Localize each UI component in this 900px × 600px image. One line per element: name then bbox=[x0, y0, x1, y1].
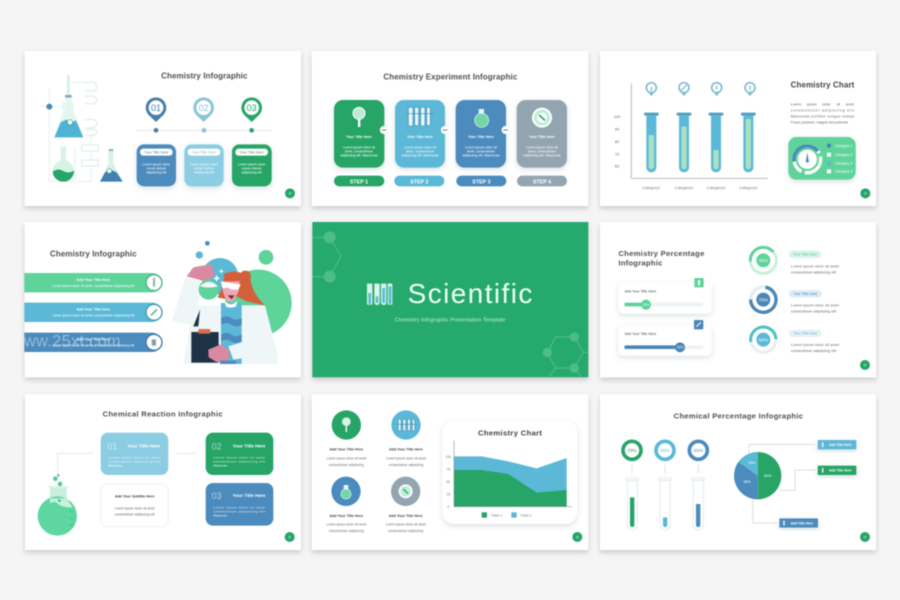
label: green: Add Title Here bbox=[829, 469, 852, 473]
test tube bar chart: 90 bbox=[615, 126, 620, 131]
title: Scientific bbox=[408, 278, 532, 309]
card 1: conse ctetuer bbox=[146, 167, 167, 171]
ring 1: 40% bbox=[749, 246, 777, 274]
label 3: Lorem ipsum dolor sit amet bbox=[791, 343, 839, 347]
pie chart bbox=[734, 452, 781, 499]
pin: 01: 01 bbox=[151, 103, 161, 113]
step card 3: Your Title Here bbox=[468, 135, 494, 139]
area chart card: 0 bbox=[447, 505, 449, 509]
subtitle box: Lorem ipsum dolor sit amet bbox=[115, 506, 155, 510]
area chart card: 100 bbox=[446, 455, 451, 459]
step card 3: Lorem ipsum dolor sit bbox=[465, 146, 497, 150]
step pill 3: STEP 3 bbox=[472, 179, 490, 185]
icon item 4: Lorem ipsum dolor sit amet bbox=[386, 523, 426, 527]
icon item 4 bbox=[386, 477, 426, 533]
icon: test tubes bbox=[367, 284, 392, 305]
pin: 01 bbox=[146, 97, 166, 122]
banner 1: Lorem ipsum dolor sit amet, consectetuer adipiscing elit bbox=[52, 284, 134, 288]
box 01: consectetuer adipiscing elit bbox=[108, 460, 160, 464]
icon item 2: Lorem ipsum dolor sit amet bbox=[386, 456, 426, 460]
step card 3: adipiscing elit. Maecenas bbox=[462, 154, 500, 158]
legend card with gauge: Category 1 bbox=[835, 144, 853, 148]
test tube bar chart: 80 bbox=[615, 139, 620, 144]
label 3: Your Title Here bbox=[793, 332, 817, 336]
page number badge bbox=[572, 532, 582, 542]
test tube bar chart: Category3 bbox=[707, 185, 726, 190]
body text: Fusce posuere, magna sed pulvinar bbox=[791, 121, 849, 125]
card 3: Your Title Here bbox=[240, 151, 264, 155]
icon item 4: Add Your Title Here bbox=[389, 514, 423, 518]
panel: chemistry infographic scientist bbox=[23, 222, 301, 377]
card 2: Lorem ipsum dolor bbox=[190, 163, 219, 167]
label 2: consectetuer adipiscing elit bbox=[791, 310, 836, 314]
icon item 2: Add Your Title Here bbox=[389, 448, 423, 452]
label 1: consectetuer adipiscing elit bbox=[791, 271, 836, 275]
icon item 3: Lorem ipsum dolor sit amet bbox=[326, 523, 366, 527]
icon item 4: consectetuer adipiscing bbox=[388, 529, 423, 533]
icon item 1: Lorem ipsum dolor sit amet bbox=[326, 456, 366, 460]
label 1: Your Title Here bbox=[793, 253, 817, 257]
banner 1 bbox=[24, 273, 162, 292]
box 01 bbox=[101, 433, 168, 475]
step card 4: amet, consectetuer bbox=[528, 150, 557, 154]
step card 4: Your Title Here bbox=[529, 135, 555, 139]
step card 1: adipiscing elit. Maecenas bbox=[340, 154, 378, 158]
panel: chemical percentage bbox=[600, 394, 876, 550]
box 02: Lorem ipsum dolor sit amet bbox=[213, 456, 265, 460]
card 2 bbox=[184, 144, 224, 186]
percent ring and tube 2: 20% bbox=[660, 448, 670, 453]
step card 4: adipiscing elit. Maecenas bbox=[523, 154, 561, 158]
step pill 4 bbox=[517, 176, 567, 186]
step pill 2 bbox=[394, 176, 444, 186]
subtitle: Chemistry Infographic Presentation Template bbox=[395, 318, 505, 324]
slider card 1: Add Your Title Here bbox=[625, 289, 656, 293]
box 01: Maecenas bbox=[108, 464, 123, 468]
box 03: Maecenas bbox=[213, 514, 228, 518]
area chart card: 75 bbox=[446, 468, 450, 472]
heading: Chemical Reaction Infographic bbox=[103, 410, 223, 419]
area chart card: Chemistry Chart bbox=[478, 429, 542, 438]
card 2: Your Title Here bbox=[192, 151, 216, 155]
body text: consectetuer adipiscing elit bbox=[791, 109, 854, 113]
box 03 bbox=[206, 483, 273, 526]
percent ring and tube 1: 70% bbox=[627, 448, 637, 453]
step card 4 bbox=[517, 100, 567, 168]
arrow connectors bbox=[380, 126, 510, 134]
test tube bar chart: Category2 bbox=[675, 185, 694, 190]
box 03: Lorem ipsum dolor sit amet bbox=[213, 506, 265, 510]
banner 1: Add Your Title Here bbox=[76, 278, 110, 282]
banner 3: Lorem ipsum dolor sit amet, consectetuer adipiscing elit bbox=[52, 344, 134, 348]
box 03: Your Title Here bbox=[233, 493, 266, 498]
label 3 bbox=[789, 330, 839, 353]
page number badge bbox=[860, 188, 870, 198]
icon item 2: consectetuer adipiscing bbox=[389, 463, 424, 467]
step card 1: amet, consectetuer bbox=[345, 150, 374, 154]
label 2 bbox=[789, 290, 839, 314]
ring 2: 70%: 70% bbox=[759, 297, 768, 302]
subtitle box bbox=[101, 484, 168, 527]
icon item 2 bbox=[386, 410, 426, 467]
illustration: scientist bbox=[172, 241, 292, 364]
heading bbox=[618, 249, 704, 268]
ring 3: 50% bbox=[749, 325, 778, 354]
box 02: consectetuer adipiscing elit bbox=[213, 460, 265, 464]
slider card 2: 70% bbox=[677, 346, 683, 350]
step card 4: Lorem ipsum dolor sit bbox=[526, 146, 558, 150]
step pill 1 bbox=[334, 176, 384, 186]
test tube bar chart: 100 bbox=[614, 114, 621, 119]
banner 3 bbox=[24, 333, 162, 352]
step card 2: adipiscing elit. Maecenas bbox=[401, 154, 439, 158]
percent ring and tube 2 bbox=[656, 441, 674, 530]
connector arrows bbox=[749, 444, 815, 523]
box 03: consectetuer adipiscing elit bbox=[213, 510, 265, 514]
illustration: flask bbox=[38, 474, 77, 536]
decoration: molecule top left bbox=[312, 231, 341, 283]
step pill 2: STEP 2 bbox=[410, 179, 428, 185]
panel: chemical reaction bbox=[25, 394, 301, 550]
label: blue: Add Title Here bbox=[791, 521, 813, 525]
label 2: Lorem ipsum dolor sit amet bbox=[791, 303, 839, 307]
test tube bar chart: Category1 bbox=[642, 185, 661, 190]
step card 1: Lorem ipsum dolor sit bbox=[343, 146, 375, 150]
page number badge bbox=[860, 532, 870, 542]
step pill 3 bbox=[456, 176, 506, 186]
heading: Chemical Percentage Infographic bbox=[674, 411, 804, 420]
step card 3 bbox=[456, 100, 506, 168]
arrows bbox=[58, 453, 197, 475]
heading: Chemistry Infographic bbox=[161, 72, 248, 81]
area chart card: 50 bbox=[446, 480, 450, 484]
legend card with gauge: Category 3 bbox=[835, 162, 853, 166]
legend card with gauge: Category 4 bbox=[835, 170, 853, 174]
pin: 03: 03 bbox=[247, 103, 257, 113]
area chart card: 25 bbox=[446, 493, 450, 497]
test tube bar chart: 70 bbox=[615, 151, 620, 156]
icon item 3: Add Your Title Here bbox=[329, 514, 363, 518]
card 3 bbox=[232, 144, 272, 186]
pin: 03 bbox=[241, 97, 262, 122]
ring 3: 50%: 50% bbox=[759, 337, 768, 342]
test tube bar chart: 60 bbox=[615, 164, 620, 169]
heading: Chemistry Chart bbox=[791, 80, 855, 89]
card 2: adipiscing elit bbox=[194, 171, 214, 175]
label 3: consectetuer adipiscing elit bbox=[791, 349, 836, 353]
label: blue bbox=[779, 518, 818, 528]
ring 1: 40%: 40% bbox=[759, 258, 768, 263]
icon item 1: consectetuer adipiscing bbox=[329, 463, 364, 467]
test tube bar chart bbox=[614, 83, 768, 190]
box 01: Lorem ipsum dolor sit amet bbox=[108, 456, 160, 460]
icon item 3: consectetuer adipiscing bbox=[329, 529, 364, 533]
legend card with gauge bbox=[788, 137, 856, 180]
card 1 bbox=[137, 144, 176, 186]
illustration: lab apparatus bbox=[40, 75, 123, 182]
decoration: molecule bottom right bbox=[543, 332, 588, 377]
card 1: adipiscing elit bbox=[146, 171, 166, 175]
panel: chemistry infographic timeline bbox=[25, 51, 301, 206]
slider card 1: 20% bbox=[643, 303, 649, 307]
step pill 4: STEP 4 bbox=[533, 179, 551, 185]
test tube bar chart: Category4 bbox=[739, 185, 758, 190]
page number badge bbox=[860, 360, 870, 370]
box 02: 02 bbox=[212, 441, 222, 451]
slider card 2 bbox=[618, 320, 712, 356]
box 02 bbox=[206, 433, 273, 475]
card 1: Your Title Here bbox=[144, 151, 168, 155]
box 01: 01 bbox=[107, 441, 117, 451]
ring 2: 70% bbox=[749, 285, 778, 314]
heading: Infographic bbox=[618, 259, 663, 268]
timeline bbox=[137, 128, 272, 133]
subtitle box: Add Your Subtitle Here bbox=[115, 494, 155, 498]
icon item 1: Add Your Title Here bbox=[329, 448, 363, 452]
label 1: Lorem ipsum dolor sit amet bbox=[791, 264, 839, 268]
subtitle box: consectetuer adipiscing elit bbox=[115, 512, 155, 516]
card 2: conse ctetuer bbox=[194, 167, 215, 171]
page number badge bbox=[285, 532, 295, 542]
area chart card bbox=[442, 421, 577, 524]
panel: chemistry chart area bbox=[312, 394, 588, 550]
panel: chemistry percentage bbox=[600, 222, 876, 377]
box 02: Maecenas bbox=[213, 464, 228, 468]
pie chart: 35% bbox=[743, 480, 751, 484]
step pill 1: STEP 1 bbox=[350, 179, 368, 185]
label: sky: Add Title Here bbox=[829, 443, 852, 447]
percent ring and tube 1 bbox=[623, 441, 641, 530]
banner 2: Lorem ipsum dolor sit amet, consectetuer adipiscing elit bbox=[52, 314, 134, 318]
label: sky bbox=[818, 440, 856, 449]
area chart card: Class 1 bbox=[491, 513, 502, 517]
step card 2: Lorem ipsum dolor sit bbox=[404, 146, 436, 150]
heading: Chemistry Infographic bbox=[50, 250, 137, 259]
heading: Chemistry Experiment Infographic bbox=[383, 72, 518, 81]
body text: Maecenas porttitor congue massa bbox=[791, 115, 855, 119]
icon item 1 bbox=[326, 410, 366, 467]
watermark: ww.25xt.com bbox=[23, 333, 121, 351]
panel: scientific title slide bbox=[312, 222, 588, 377]
step card 2: amet, consectetuer bbox=[406, 150, 435, 154]
pie chart: 15% bbox=[748, 461, 756, 465]
box 01: Your Title Here bbox=[127, 443, 160, 448]
slider card 2: Add Your Title Here bbox=[625, 332, 656, 336]
box 02: Your Title Here bbox=[233, 443, 266, 448]
pie chart: 50% bbox=[764, 474, 772, 478]
banner 2: Add Your Title Here bbox=[76, 307, 110, 311]
pin: 02 bbox=[193, 97, 214, 122]
heading: Chemistry Percentage bbox=[618, 249, 704, 258]
card 3: Lorem ipsum dolor bbox=[238, 163, 266, 167]
step card 1: Your Title Here bbox=[346, 135, 372, 139]
body text bbox=[791, 102, 855, 125]
panel: chemistry experiment steps bbox=[312, 51, 588, 206]
body text: Lorem ipsum dolor sit amet bbox=[791, 102, 854, 106]
legend card with gauge: Category 2 bbox=[835, 153, 853, 157]
percent ring and tube 3: 50% bbox=[694, 448, 703, 453]
step card 2 bbox=[395, 100, 445, 168]
percent ring and tube 3 bbox=[689, 441, 707, 530]
card 1: Lorem ipsum dolor bbox=[143, 163, 171, 167]
box 03: 03 bbox=[212, 491, 222, 501]
icon pins bbox=[646, 83, 755, 96]
label: green bbox=[818, 466, 856, 475]
banner 3: Add Your Title Here bbox=[76, 337, 110, 341]
icon item 3 bbox=[326, 477, 366, 533]
area chart card: Class 2 bbox=[520, 513, 532, 517]
label 2: Your Title Here bbox=[793, 292, 817, 296]
label 1 bbox=[789, 251, 839, 275]
pin: 02: 02 bbox=[199, 103, 209, 113]
card 3: adipiscing elit bbox=[242, 171, 262, 175]
panel: chemistry chart test tubes bbox=[600, 51, 876, 206]
step card 2: Your Title Here bbox=[407, 135, 433, 139]
step card 3: amet, consectetuer bbox=[467, 150, 496, 154]
banner 2 bbox=[24, 303, 162, 322]
card 3: conse ctetuer bbox=[242, 167, 263, 171]
slider card 1 bbox=[618, 278, 712, 314]
page number badge bbox=[285, 188, 295, 198]
step card 1 bbox=[334, 100, 384, 168]
